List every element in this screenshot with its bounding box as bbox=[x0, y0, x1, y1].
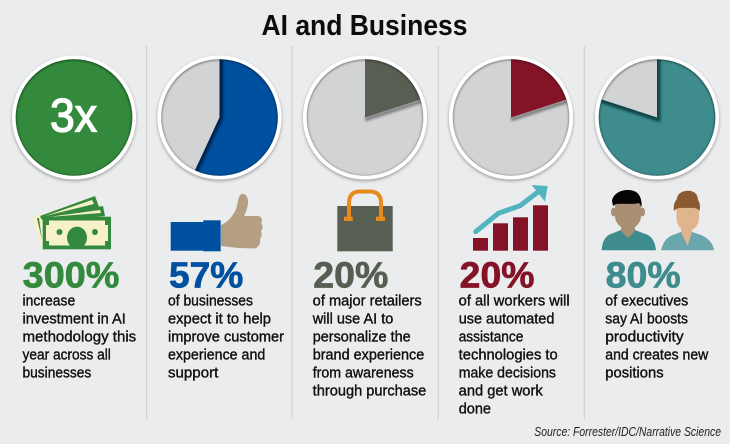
description: businesses bbox=[22, 366, 91, 382]
icon: thumbs up bbox=[171, 194, 262, 251]
panel: 20% workers bbox=[449, 56, 573, 418]
stat: 300%: 300% bbox=[23, 255, 119, 296]
description: technologies to bbox=[459, 348, 558, 364]
icon: shopping bag bbox=[337, 192, 393, 251]
description: from awareness bbox=[313, 366, 414, 382]
man bbox=[602, 190, 656, 250]
title: AI and Business bbox=[262, 10, 468, 42]
description: methodology this bbox=[22, 330, 136, 346]
icon: two executives bbox=[602, 190, 714, 250]
description bbox=[22, 294, 136, 382]
description bbox=[168, 294, 284, 382]
description bbox=[312, 294, 426, 400]
stat: 20%: 20% bbox=[313, 255, 388, 296]
description: personalize the bbox=[313, 330, 411, 346]
description: make decisions bbox=[459, 366, 556, 382]
description: assistance bbox=[459, 330, 523, 346]
circle: 3x: 3x bbox=[50, 88, 97, 142]
pie chart: 80% bbox=[595, 56, 719, 180]
description: expect it to help bbox=[168, 312, 271, 328]
description: use automated bbox=[459, 312, 554, 328]
icon: money bbox=[32, 196, 111, 249]
description: will use AI to bbox=[312, 312, 393, 328]
woman bbox=[661, 191, 714, 250]
pie chart: 20% retailers bbox=[303, 56, 427, 180]
description: through purchase bbox=[313, 384, 426, 400]
description: of major retailers bbox=[313, 294, 422, 310]
stat: 57%: 57% bbox=[169, 255, 243, 296]
pie chart: 20% workers bbox=[449, 56, 573, 180]
panel: 57% customer experience bbox=[158, 56, 284, 382]
description: positions bbox=[605, 366, 664, 382]
stat: 80%: 80% bbox=[606, 255, 681, 296]
description: of executives bbox=[605, 294, 688, 310]
stat: 20%: 20% bbox=[460, 255, 534, 296]
description: productivity bbox=[605, 330, 684, 346]
panel: 20% retailers bbox=[303, 56, 427, 400]
panel: 300% investment bbox=[12, 56, 136, 382]
panel: 80% executives bbox=[595, 56, 719, 382]
description bbox=[459, 294, 570, 418]
description: improve customer bbox=[168, 330, 284, 346]
description bbox=[605, 294, 709, 382]
description: say AI boosts bbox=[605, 312, 688, 328]
description: year across all bbox=[22, 348, 111, 364]
description: experience and bbox=[168, 348, 265, 364]
description: of businesses bbox=[168, 294, 253, 310]
description: increase bbox=[22, 294, 75, 310]
description: investment in AI bbox=[22, 312, 126, 328]
description: done bbox=[459, 402, 491, 418]
description: brand experience bbox=[313, 348, 424, 364]
description: support bbox=[168, 366, 218, 382]
description: and get work bbox=[459, 384, 543, 400]
icon: rising bar chart with arrow bbox=[473, 185, 548, 251]
description: of all workers will bbox=[459, 294, 570, 310]
pie chart: 57% bbox=[158, 56, 282, 180]
description: and creates new bbox=[605, 348, 709, 364]
circle: 3x bbox=[12, 56, 136, 180]
